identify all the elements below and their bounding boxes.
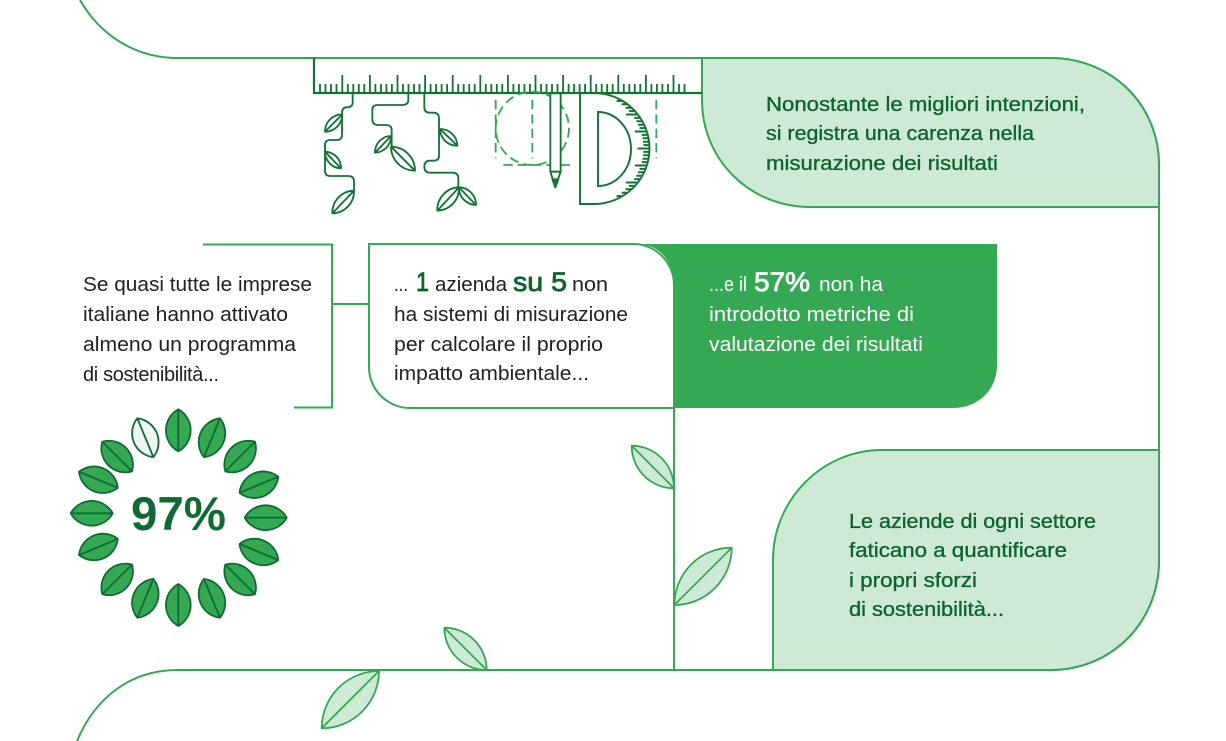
panel: white 1 in 5: [369, 244, 674, 408]
icon: pale leaves on stems: [322, 446, 732, 728]
icon: pencil: [550, 93, 561, 187]
icon: dashed construction lines: [496, 92, 656, 165]
panel: bottom right callout: di sostenibilità...: [849, 599, 1004, 621]
panel: solid green 57 percent: 57%: [754, 267, 810, 297]
panel: bottom right callout: i propri sforzi: [849, 570, 977, 592]
panel: white 1 in 5: non: [572, 274, 608, 296]
panel: top right callout: Nonostante le migliori intenzioni,: [766, 94, 1085, 116]
panel: white 1 in 5: ha sistemi di misurazione: [394, 304, 628, 326]
text block: intro: Se quasi tutte le imprese: [83, 274, 312, 296]
text block: intro: [83, 274, 312, 386]
panel: bottom right callout: Le aziende di ogni settore: [849, 511, 1096, 533]
panel: solid green 57 percent: non ha: [819, 274, 884, 296]
figure: 97 percent: 97%: [131, 487, 226, 540]
panel: white 1 in 5: su 5: [513, 267, 567, 297]
text block: intro: almeno un programma: [83, 334, 297, 356]
panel: solid green 57 percent: valutazione dei risultati: [709, 334, 923, 356]
panel: solid green 57 percent: introdotto metriche di: [709, 304, 914, 326]
panel: top right callout: misurazione dei risultati: [766, 153, 998, 175]
panel: white 1 in 5: ...: [394, 274, 408, 296]
connector: stem between panels: [673, 408, 675, 670]
panel: white 1 in 5: impatto ambientale...: [394, 363, 589, 385]
panel: top right callout: [702, 58, 1159, 207]
panel: white 1 in 5: per calcolare il proprio: [394, 334, 603, 356]
text block: intro: italiane hanno attivato: [83, 304, 288, 326]
icon: hanging vines with leaves: [325, 93, 476, 213]
panel: solid green 57 percent: ...e il: [709, 274, 747, 296]
chart: ring of 16 leaves, 97 percent: [71, 409, 287, 626]
text block: intro: di sostenibilità...: [83, 364, 219, 386]
panel: bottom right callout: faticano a quantificare: [849, 540, 1067, 562]
panel: white 1 in 5: azienda: [435, 274, 508, 296]
panel: white 1 in 5: 1: [416, 267, 429, 297]
panel: bottom right callout: [773, 450, 1159, 670]
panel: solid green 57 percent: [636, 244, 997, 408]
icon: ruler: [314, 58, 702, 93]
bracket: left text connector: [203, 244, 369, 408]
icon: protractor: [580, 93, 650, 204]
panel: top right callout: si registra una carenza nella: [766, 123, 1035, 145]
